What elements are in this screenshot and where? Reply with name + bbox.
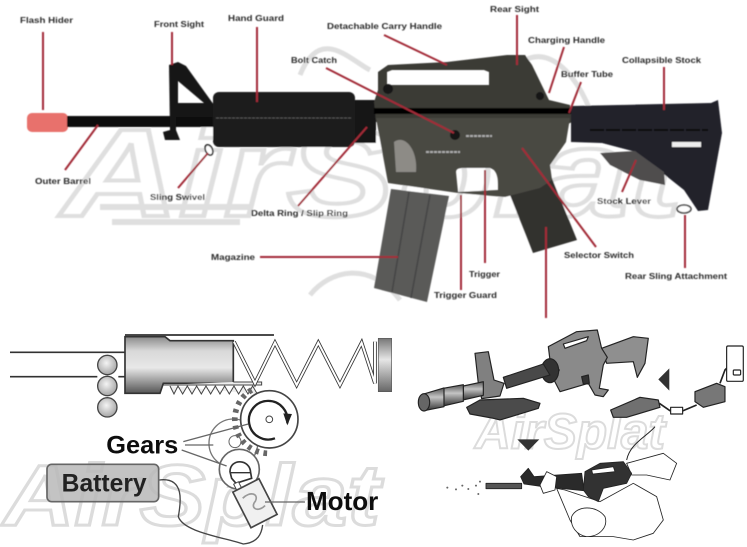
watermark: top: AirSplat [58,104,688,243]
delta ring [541,359,559,383]
rifle: delta ring and barrel nut [355,100,376,143]
muzzle [418,394,430,411]
part labels: Rear Sling Attachment [625,272,727,281]
panel: charging and firing illustration [418,330,743,540]
shooter arm and shoulder [557,483,663,540]
muzzle pellets [446,481,481,495]
part labels: Trigger Guard [434,291,497,300]
BB pellets [98,355,117,417]
label: Battery: Battery [62,471,147,498]
gear: small with bevel [219,449,259,489]
piston rack [163,382,262,394]
inner barrel section [503,364,550,388]
handguard [521,468,584,491]
rifle: stock lever [600,151,665,185]
arrow: down [517,439,539,451]
gear: large with teeth [235,390,298,453]
label: Motor: Motor [306,486,378,516]
rifle: flash hider [27,113,68,132]
part labels: Hand Guard [228,14,284,23]
rifle: markings [426,136,492,152]
part labels: Buffer Tube [561,70,614,79]
carry handle slot [592,467,615,474]
part labels: Sling Swivel [150,193,205,202]
battery wire [159,480,263,544]
wire above hand [627,427,655,460]
rifle: front sight [163,62,214,140]
rifle: sling swivel [204,144,214,156]
rifle: receiver emblem [394,140,416,172]
part labels: Flash Hider [20,16,73,25]
part labels: Selector Switch [564,251,634,260]
part labels: Rear Sight [490,5,539,14]
part labels: Bolt Catch [291,56,337,65]
part labels: Front Sight [154,20,204,29]
part labels: Magazine [211,253,256,262]
watermark: charging panel: AirSplat [473,403,667,459]
watermark: gearbox: AirSplat [1,448,384,544]
battery box [47,464,159,502]
gear leader lines [182,424,305,502]
part labels: Detachable Carry Handle [327,22,443,31]
gear: middle [209,419,258,468]
part labels: Charging Handle [528,36,606,45]
wire connector [671,407,683,414]
rifle: bolt catch and rear pins [383,84,544,140]
rifle: hand guard [213,92,355,147]
front hand [540,472,557,493]
handguard shell [467,398,540,420]
part labels: Stock Lever [597,197,651,206]
panel: labelled rifle diagram [20,5,727,318]
spring [234,342,375,385]
flash hider [424,388,444,411]
part labels: Delta Ring / Slip Ring [251,209,348,218]
firing rifle and shooter [486,453,677,540]
wall outlet [727,346,743,381]
part labels: Trigger [469,270,500,279]
barrel lines [10,335,274,377]
label: Gears: Gears [106,431,178,459]
part labels: Collapsible Stock [622,56,702,65]
receiver and handle [583,462,632,502]
rifle: pistol grip [510,176,577,253]
barrel [486,483,522,489]
rifle: rear sling ring [677,205,691,213]
spring end plate [378,338,392,392]
panel: gearbox mechanism [1,335,392,544]
battery pack [611,397,660,417]
front sight [475,352,504,399]
rifle: collapsible stock [571,100,722,211]
outlet socket [733,370,741,375]
carry handle slot [563,337,588,348]
elbow pad [571,508,606,537]
rifle: lower receiver [376,118,570,197]
motor shaft and body [230,473,277,528]
callout lines [43,15,685,318]
upper and lower receiver [548,330,608,397]
charger box [695,383,725,407]
watermark: top [58,49,688,300]
charger wire [659,357,738,411]
rifle: top rail [374,108,572,114]
rifle: magazine [374,189,449,302]
piston cylinder [125,337,233,393]
arrow: left [658,368,669,391]
barrel [463,382,483,400]
rear hand [627,453,677,480]
disassembled rifle [418,330,743,420]
rifle: carry handle and upper receiver [374,55,572,128]
magwell dark detail [582,375,589,384]
part labels: Outer Barrel [35,177,91,186]
part labels [20,5,727,300]
rifle: stock slot [672,142,701,147]
rifle: outer barrel [67,116,215,127]
stock [602,337,648,377]
